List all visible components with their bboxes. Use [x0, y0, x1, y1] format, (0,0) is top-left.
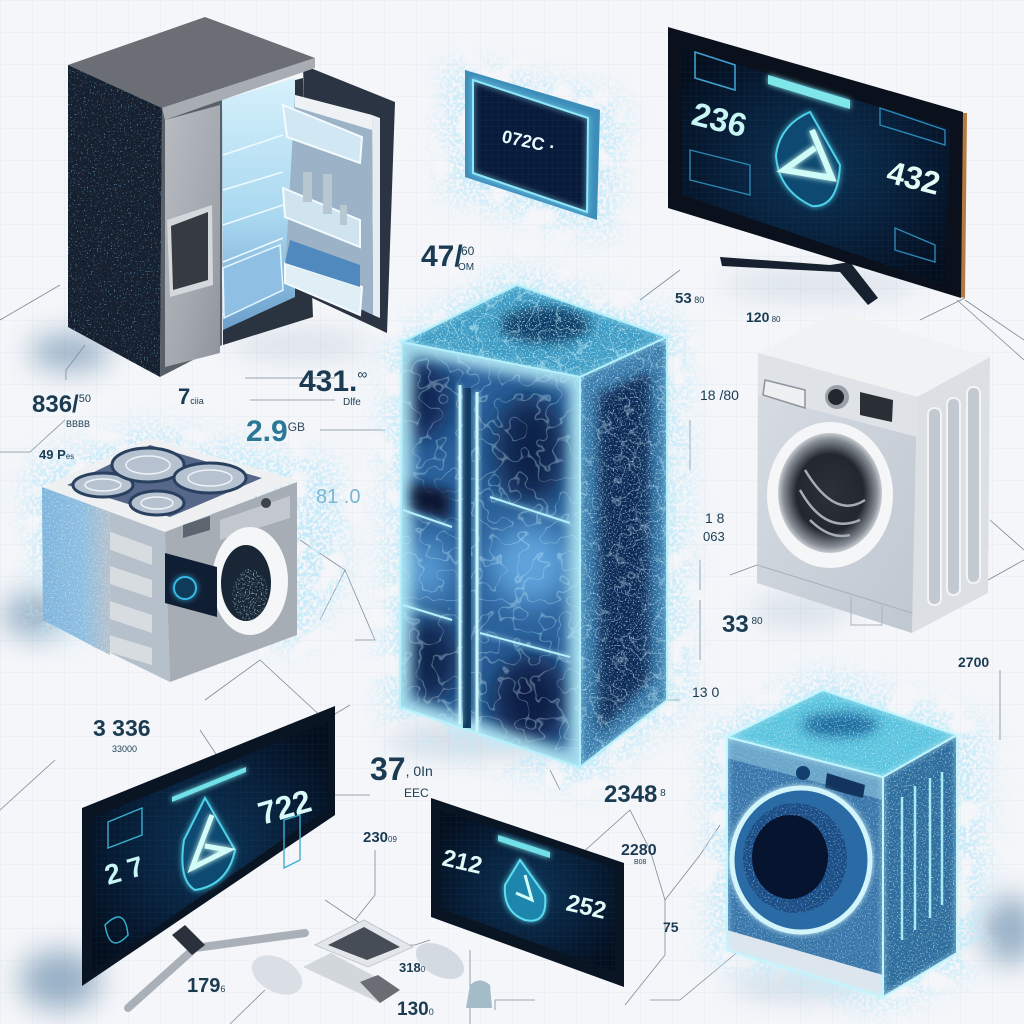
- drawer: [763, 380, 805, 408]
- stove hatch with logo: [165, 553, 217, 617]
- bottom-left stand: [128, 933, 305, 1008]
- fridge door backing: [160, 92, 222, 377]
- small stone: [466, 980, 492, 1008]
- stove-washer: left: [42, 438, 297, 682]
- label 33: 80: [749, 616, 763, 627]
- label 2.9: 2.9: [246, 415, 288, 448]
- water dispenser: [167, 205, 213, 297]
- keypad: [303, 953, 400, 1003]
- centre fridge top: [402, 285, 667, 377]
- label 53: 53 80: [675, 290, 704, 307]
- glow washer drum: [732, 788, 870, 932]
- centre fridge front: [390, 342, 580, 767]
- stove top: [42, 438, 297, 532]
- glowing wireframe fridge: centre: [390, 285, 667, 767]
- label 2700: 2700: [958, 654, 989, 670]
- glow washer front: [727, 737, 883, 997]
- label 3336: 3 336: [93, 715, 151, 741]
- label 13: 13 0: [692, 684, 719, 700]
- floating data labels: 063: [703, 529, 725, 544]
- door frame dark strip: [222, 78, 313, 345]
- right reading: 432: [883, 154, 944, 202]
- label 2.9: GB: [288, 420, 305, 434]
- floating data labels: [32, 240, 989, 1020]
- floating panel with reading: [465, 70, 600, 220]
- label 7: 7ciia: [178, 384, 204, 409]
- fridge top: [68, 17, 315, 108]
- monitor: bottom left: [82, 706, 335, 1008]
- washing machine: right: [757, 312, 990, 633]
- label 81 faded: 81 .0: [316, 486, 360, 508]
- panel reading: 072C ·: [500, 126, 557, 157]
- burners: [73, 448, 246, 515]
- stove side: [42, 487, 170, 682]
- bottom-centre screen: [440, 810, 615, 972]
- label 318: 3180: [399, 960, 426, 975]
- label 2348: 8: [657, 788, 666, 799]
- label 18: 18 /80: [700, 387, 739, 403]
- drop logo: [505, 860, 545, 921]
- soft floor shadows: [3, 275, 1024, 1010]
- monitor stand: [720, 257, 878, 305]
- label 37: , 0In: [406, 763, 433, 779]
- fridge silver door: [165, 105, 220, 367]
- drop logo: [182, 798, 235, 890]
- glowing edges: [400, 285, 667, 767]
- stove door ring: [212, 527, 288, 635]
- label 836: 50: [79, 393, 91, 405]
- label 49: 49 Pes: [39, 447, 74, 462]
- label 37: 37: [370, 751, 406, 787]
- fridge interior and shelves: [222, 78, 295, 330]
- stove front: [165, 482, 297, 682]
- left mouse: [245, 947, 309, 1003]
- floating data labels: 60: [461, 244, 475, 258]
- door bins: [283, 105, 362, 163]
- monitor: bottom left: 2 7: [101, 850, 147, 891]
- keyboard: [315, 920, 413, 967]
- header bar: [498, 835, 550, 858]
- floating data labels: OM: [458, 262, 474, 273]
- floating data labels: BBBB: [66, 419, 90, 429]
- washer top: [758, 312, 990, 397]
- icons: [105, 808, 300, 943]
- screen header bar: [768, 75, 850, 109]
- appliance: open refrigerator, top left: [68, 17, 395, 377]
- door handles: [463, 388, 471, 728]
- label 2280: 2280: [621, 842, 657, 859]
- fridge dark side: [68, 65, 162, 377]
- label 47: 47/: [421, 240, 463, 273]
- bottom-left screen: [92, 722, 328, 972]
- label 1 8: 1 8: [705, 510, 725, 526]
- drop logo: [776, 112, 840, 206]
- label 230: 23009: [363, 829, 397, 846]
- header bar: [172, 767, 246, 802]
- lower widgets: [690, 108, 945, 262]
- label 75: 75: [663, 919, 679, 935]
- washer front: [757, 353, 917, 633]
- label 836: 836/: [32, 391, 79, 418]
- glowing wireframe washer: bottom right: [727, 690, 957, 997]
- washer side: [912, 357, 990, 633]
- glow washer side: [883, 735, 957, 997]
- right mouse: [410, 936, 470, 986]
- centre fridge side: [580, 337, 667, 767]
- base panel: [757, 565, 912, 625]
- monitor: bottom centre: 252: [564, 890, 609, 925]
- readings: 212: [440, 845, 485, 880]
- control knob and display: [825, 385, 849, 409]
- label 431: ∞: [357, 366, 367, 382]
- connector lines: [0, 270, 1024, 1024]
- label 33: 33: [722, 611, 749, 638]
- label 120: 120 80: [746, 309, 781, 325]
- label 431: 431.: [299, 365, 357, 398]
- floating data labels: B08: [634, 859, 647, 866]
- label 2348: 2348: [604, 781, 657, 808]
- label 130: 1300: [397, 999, 434, 1020]
- open door: [303, 65, 395, 333]
- readings: 722: [254, 782, 315, 832]
- screen icon box: [695, 52, 735, 90]
- keyboard and mice: [245, 920, 492, 1008]
- glow washer top: [727, 690, 957, 777]
- monitor: top right: [668, 27, 967, 305]
- glow washer controls: [796, 766, 810, 780]
- monitor screen: [682, 48, 950, 285]
- washer drum: [767, 422, 893, 568]
- floating data labels: 33000: [112, 744, 137, 754]
- label 179: 1796: [187, 975, 225, 997]
- floating data labels: EEC: [404, 786, 429, 800]
- left reading: 236: [688, 95, 751, 144]
- monitor: bottom centre: [431, 798, 624, 987]
- floating data labels: Dlfe: [343, 397, 361, 408]
